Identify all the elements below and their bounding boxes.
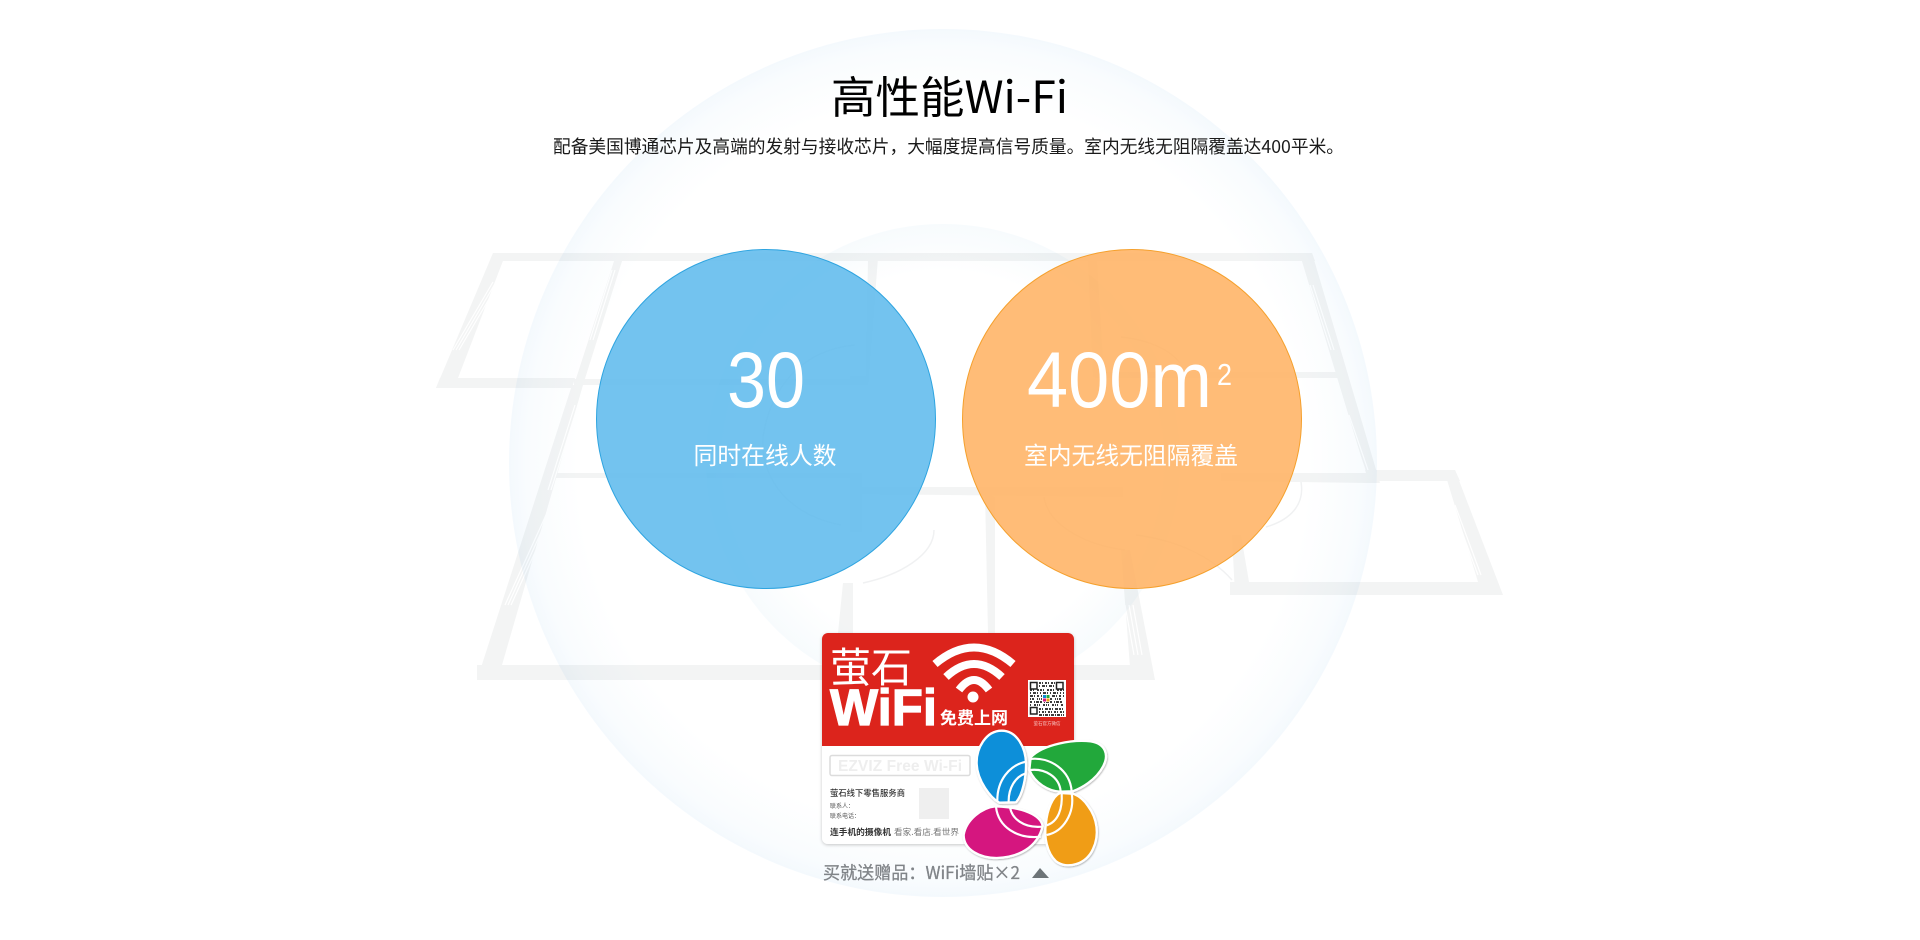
red sticker header: 萤石官方微信 xyxy=(1034,720,1061,727)
floor plan xyxy=(436,253,1503,680)
stat circle: concurrent users: 30 xyxy=(727,335,805,424)
WiFi sticker card xyxy=(822,633,1074,844)
EZVIZ name box: EZVIZ Free Wi-Fi xyxy=(838,758,962,775)
background signal circles xyxy=(509,29,1377,897)
stat circle: concurrent users: 同时在线人数 xyxy=(694,436,836,471)
stat circle: coverage area: 400m xyxy=(1027,335,1212,424)
window strips xyxy=(453,270,1481,655)
icon: EZVIZ petal logo xyxy=(964,731,1106,865)
wifi symbol xyxy=(935,648,1013,702)
QR code xyxy=(1028,680,1066,717)
red sticker header: WiFi xyxy=(830,679,937,736)
dealer info: 连手机的摄像机 xyxy=(830,825,891,838)
red sticker header: 免费上网 xyxy=(940,704,1008,729)
dealer info: 看家.看店.看世界 xyxy=(894,826,959,838)
stat circle: coverage area xyxy=(962,250,1302,588)
red sticker header xyxy=(822,633,1074,746)
title: 高性能Wi-Fi xyxy=(831,62,1068,126)
door arcs xyxy=(763,337,1302,583)
dealer info: 联系人： xyxy=(830,801,854,810)
stat circle: coverage area: 室内无线无阻隔覆盖 xyxy=(1024,436,1238,471)
dealer info: 联系电话： xyxy=(830,811,860,820)
dealer info: 萤石线下零售服务商 xyxy=(830,787,905,799)
stat circle: coverage area: 2 xyxy=(1217,357,1232,392)
stat circle: concurrent users xyxy=(596,250,936,588)
dealer info xyxy=(830,787,959,838)
red sticker header: 萤石 xyxy=(830,634,912,694)
subtitle: 配备美国博通芯片及高端的发射与接收芯片，大幅度提高信号质量。室内无线无阻隔覆盖达400平米。 xyxy=(553,133,1344,159)
gift caption: 买就送赠品：WiFi墙贴×2 xyxy=(823,860,1020,885)
icon: collapse triangle xyxy=(1032,868,1049,878)
